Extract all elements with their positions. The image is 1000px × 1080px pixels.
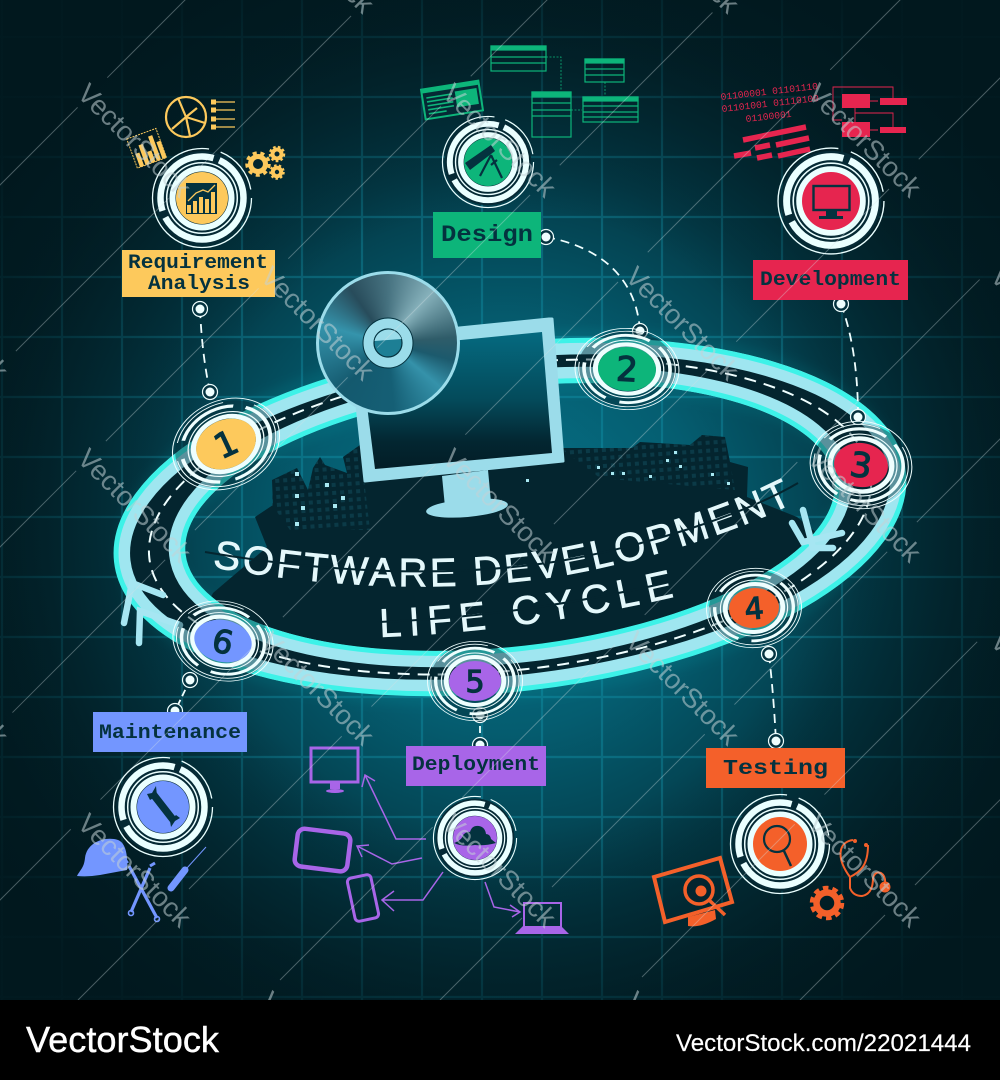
icon: crossed tools xyxy=(124,861,160,922)
outer neon band xyxy=(97,301,923,733)
footer brand: VectorStock xyxy=(26,1019,220,1060)
watermark: repeated VectorStock text: VectorStock xyxy=(437,807,563,933)
icon: code bars xyxy=(734,127,810,158)
label: Testing xyxy=(723,758,828,781)
icon: stethoscope xyxy=(841,839,890,896)
icon: tablet device xyxy=(294,828,351,872)
road track xyxy=(103,307,917,727)
label: Development xyxy=(760,269,901,292)
label: Design xyxy=(441,222,533,248)
label xyxy=(753,260,908,300)
central cycle ring xyxy=(114,334,906,700)
watermark: repeated VectorStock text: VectorStock xyxy=(437,442,563,568)
watermark: repeated VectorStock text: Vect xyxy=(255,985,315,1045)
compact disc xyxy=(316,271,460,415)
icon: tilted layout card xyxy=(421,81,483,119)
label xyxy=(433,212,541,258)
icon: monitor with bug xyxy=(654,858,732,926)
monitor stand xyxy=(442,470,491,507)
numbered node 5: 5 xyxy=(465,665,485,700)
numbered node 4: 4 xyxy=(743,591,765,628)
numbered node 2: 2 xyxy=(615,349,639,391)
panel: development xyxy=(720,81,908,300)
inner neon band xyxy=(162,342,858,692)
icon: flow diagram xyxy=(833,87,907,137)
ring dial xyxy=(114,758,212,856)
watermark: repeated VectorStock text: VectorStock xyxy=(437,77,563,203)
numbered node 5 xyxy=(427,641,523,721)
title: software development life cycle: LIFE CYCLE xyxy=(382,570,674,638)
inner ground with skyline xyxy=(212,435,816,651)
label: Maintenance xyxy=(99,722,241,745)
numbered node 1: 1 xyxy=(208,422,245,468)
connector: requirement analysis to node 1 xyxy=(192,302,218,400)
disc hub xyxy=(363,318,413,368)
numbered node 6: 6 xyxy=(209,621,237,663)
monitor frame xyxy=(350,319,563,481)
icon: binary code: 01100001 xyxy=(745,109,792,125)
icon: binary code: 01101001 01110100 xyxy=(721,93,820,115)
monitor xyxy=(350,319,563,521)
icon disc: cloud xyxy=(453,816,497,860)
connector: design to node 2 xyxy=(538,230,648,338)
icon: gears xyxy=(247,147,284,178)
footer image id: VectorStock.com/22021444 xyxy=(676,1030,971,1057)
icon disc: growth chart xyxy=(176,172,228,224)
label xyxy=(706,748,845,788)
watermark: repeated VectorStock text: VectorStock xyxy=(620,260,746,386)
watermark: repeated VectorStock text: VectorStock xyxy=(255,260,381,386)
ring dial xyxy=(730,794,830,894)
connector: node 4 to testing xyxy=(762,646,784,748)
monitor screen xyxy=(360,332,552,469)
title line 2 xyxy=(380,596,678,637)
label xyxy=(93,712,247,752)
ring glow xyxy=(132,325,888,709)
watermark: repeated VectorStock text: Vect xyxy=(620,985,680,1045)
direction arrow left xyxy=(124,583,180,643)
panel: deployment xyxy=(294,746,569,934)
footer bar xyxy=(0,1000,1000,1080)
watermark: repeated VectorStock text: VectorStock xyxy=(255,625,381,751)
road centre dashes xyxy=(132,324,888,710)
watermark: line ends above footer xyxy=(78,915,885,1000)
icon: binary code: 01100001 01101110 xyxy=(720,81,819,103)
watermark: repeated VectorStock text: VectorStock xyxy=(620,625,746,751)
label xyxy=(406,746,546,786)
icon: hard hat xyxy=(77,839,127,876)
icon: database schema tables xyxy=(491,46,638,137)
title line 1 xyxy=(212,498,803,586)
ring dial xyxy=(433,796,517,880)
disc face xyxy=(316,271,460,415)
ring dial xyxy=(152,148,252,248)
arrows to devices xyxy=(357,775,520,917)
connector: development to node 3 xyxy=(834,296,866,424)
watermark: repeated VectorStock text: VectorStock xyxy=(72,77,198,203)
title: software development life cycle: SOFTWARE DEVELOPMENT xyxy=(214,478,785,587)
panel: testing xyxy=(654,748,890,926)
watermark: repeated VectorStock text: VectorStock xyxy=(72,442,198,568)
ring dial xyxy=(442,116,534,208)
icon: monitor device xyxy=(311,748,358,793)
numbered node 3: 3 xyxy=(847,445,874,487)
ring dial xyxy=(778,148,884,254)
numbered node 6 xyxy=(165,592,281,690)
connector: node 5 to deployment xyxy=(472,708,488,752)
icon disc: magnifier xyxy=(753,817,807,871)
icon: phone device xyxy=(347,874,379,922)
numbered node 4 xyxy=(703,564,805,652)
direction arrow right xyxy=(792,510,842,548)
panel: design xyxy=(421,46,638,258)
icon: screwdriver xyxy=(171,847,206,888)
title: software development life cycle xyxy=(204,478,798,638)
panel: requirement analysis xyxy=(122,97,284,297)
label: Deployment xyxy=(412,754,540,777)
segmented-display gaps xyxy=(205,483,798,622)
watermark: repeated VectorStock text: VectorStock xyxy=(72,807,198,933)
icon: pie chart xyxy=(166,97,235,137)
icon: laptop device xyxy=(515,903,569,934)
connector: node 6 to maintenance xyxy=(168,672,198,718)
watermark: repeated VectorStock text: VectorStock xyxy=(802,807,928,933)
label: Requirement xyxy=(128,252,268,275)
icon: binary code xyxy=(720,81,820,125)
icon: bar chart tile xyxy=(127,128,167,168)
label xyxy=(122,250,275,297)
numbered node 2 xyxy=(573,326,681,412)
numbered node 1 xyxy=(157,381,295,507)
icon: gear xyxy=(812,888,842,918)
label: Analysis xyxy=(148,273,250,296)
icon disc: monitor xyxy=(802,172,860,230)
watermark: repeated VectorStock text: VectorStock xyxy=(802,77,928,203)
icon disc: ruler and compass xyxy=(464,138,512,186)
icon disc: wrench xyxy=(137,781,189,833)
panel: maintenance xyxy=(77,712,247,922)
numbered node 3 xyxy=(804,415,918,515)
watermark: repeated VectorStock text: VectorStock xyxy=(802,442,928,568)
